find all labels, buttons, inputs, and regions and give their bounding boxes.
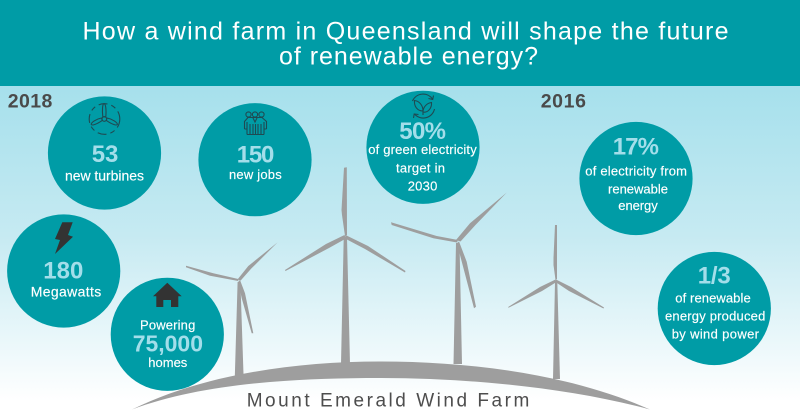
stat: 150 new jobs: [198, 103, 312, 216]
label: 2030: [408, 178, 437, 193]
turbine 1: [186, 242, 278, 377]
label bottom: homes: [148, 355, 188, 370]
label: of green electricity: [368, 142, 477, 157]
label top: Powering: [140, 318, 195, 333]
stat: 50% green electricity target: [366, 91, 480, 204]
value: 75,000: [133, 331, 203, 357]
value: 150: [237, 142, 274, 169]
icon: people: [244, 112, 266, 134]
stat: 1/3 of renewable energy by wind power: [658, 252, 771, 365]
title banner: of renewable energy?: [279, 43, 538, 71]
hill: [132, 362, 650, 410]
turbine 2: [285, 167, 406, 364]
value: 17%: [613, 133, 659, 160]
year label: 2018: 2018: [8, 90, 52, 112]
label: by wind power: [672, 326, 760, 341]
label: new jobs: [229, 167, 282, 182]
label: energy produced: [665, 308, 765, 323]
icon: lightning bolt: [55, 222, 73, 254]
year label: 2016: 2016: [541, 90, 586, 112]
stat: 53 new turbines: [48, 96, 161, 210]
label: Megawatts: [31, 284, 101, 300]
label: target in: [396, 160, 445, 175]
hill with wind turbines: [132, 167, 650, 410]
value: 53: [92, 141, 118, 168]
label: renewable: [608, 182, 668, 197]
label: [665, 290, 765, 341]
turbine 4: [508, 225, 604, 379]
label: of electricity from: [585, 164, 687, 179]
label: [368, 142, 477, 193]
title banner: How a wind farm in Queensland will shape the future: [82, 17, 728, 45]
value: 180: [43, 257, 83, 284]
label: new turbines: [65, 168, 144, 184]
icon: turbine: [89, 104, 120, 134]
icon: house: [153, 283, 182, 307]
stat: 17% electricity from renewable energy: [579, 122, 693, 235]
label: energy: [618, 198, 658, 213]
stat: powering 75,000 homes: [111, 278, 224, 391]
label: [585, 164, 687, 213]
hill caption: Mount Emerald Wind Farm: [247, 391, 529, 412]
turbine 3: [391, 192, 507, 364]
title banner: [0, 0, 800, 86]
stat: 180 Megawatts: [7, 214, 120, 328]
label: of renewable: [675, 290, 751, 305]
value: 50%: [399, 118, 446, 145]
value: 1/3: [698, 262, 731, 289]
icon: leaves in circular arrows: [412, 94, 434, 118]
